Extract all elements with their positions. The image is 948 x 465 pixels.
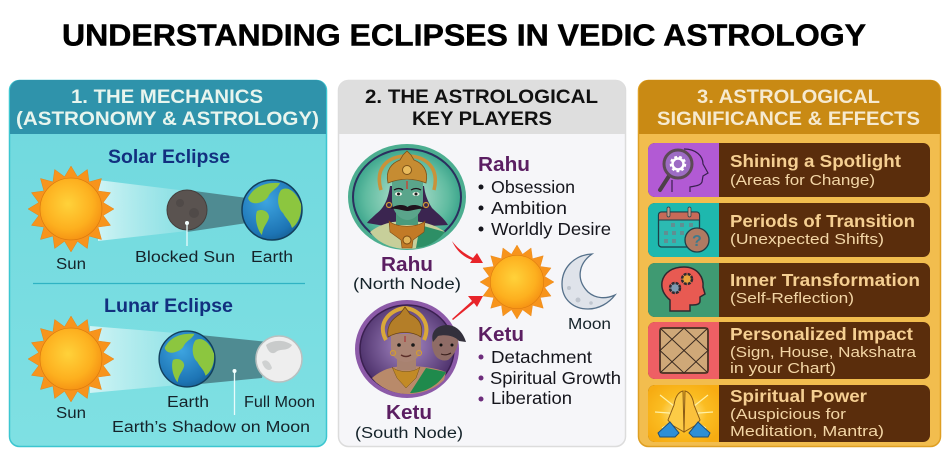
- panel header: key players: 2. THE ASTROLOGICAL: [365, 86, 598, 108]
- panel header: mechanics: [10, 80, 326, 134]
- row: shining a spotlight: Shining a Spotlight: [730, 151, 901, 171]
- label: north node: (North Node): [353, 276, 461, 293]
- icon: calendar with question mark: ?: [692, 233, 702, 250]
- panel header: significance: [639, 80, 940, 134]
- portrait: ketu: [355, 300, 466, 398]
- panel header: mechanics: (ASTRONOMY & ASTROLOGY): [16, 108, 319, 130]
- title: UNDERSTANDING ECLIPSES IN VEDIC ASTROLOGY: [62, 18, 866, 52]
- row: inner transformation: (Self-Reflection): [730, 290, 854, 307]
- text block: rahu traits: Worldly Desire: [491, 219, 611, 239]
- icon: crescent moon: [562, 254, 615, 309]
- icon: blocked sun: [167, 190, 207, 230]
- text block: ketu traits: Spiritual Growth: [490, 368, 621, 388]
- text block: rahu traits: [478, 154, 611, 239]
- row: spiritual power: Spiritual Power: [730, 386, 867, 406]
- text block: ketu traits: [478, 324, 621, 408]
- arrow: rahu to sun: [452, 241, 483, 263]
- row: spiritual power: (Auspicious for: [730, 406, 846, 423]
- label: earth: Earth: [251, 249, 293, 266]
- icon: praying hands: [655, 391, 713, 437]
- row: spiritual power: Meditation, Mantra): [730, 423, 884, 440]
- text block: rahu traits: Rahu: [478, 154, 530, 176]
- heading: lunar eclipse: Lunar Eclipse: [104, 295, 233, 317]
- arrow: ketu to sun: [452, 296, 483, 320]
- row: personalized impact: (Sign, House, Nakshatra: [730, 344, 917, 361]
- panel header: mechanics: 1. THE MECHANICS: [71, 86, 263, 108]
- diagram: solar eclipse: [28, 166, 302, 252]
- label: full moon: Full Moon: [244, 394, 315, 411]
- crown: [387, 151, 427, 183]
- icon: full moon: [256, 336, 302, 382]
- row: personalized impact: [648, 322, 930, 379]
- panel header: key players: [339, 80, 625, 134]
- necklace: [389, 221, 425, 248]
- panel: significance and effects: [638, 80, 940, 446]
- row: periods of transition: Periods of Transition: [730, 211, 915, 231]
- text block: ketu traits: Liberation: [491, 388, 572, 408]
- shoulders: [370, 221, 445, 249]
- icon: sun: [28, 316, 114, 402]
- row: periods of transition: (Unexpected Shifts): [730, 231, 884, 248]
- text block: rahu traits: Ambition: [491, 198, 567, 218]
- row: personalized impact: Personalized Impact: [730, 324, 913, 344]
- label: moon: Moon: [568, 316, 611, 333]
- row: personalized impact: in your Chart): [730, 360, 836, 377]
- text block: ketu traits: Ketu: [478, 324, 524, 346]
- label: rahu: Rahu: [381, 254, 433, 276]
- row: periods of transition: [648, 203, 930, 257]
- row: spiritual power: [648, 385, 930, 442]
- halo: [379, 156, 435, 190]
- label: earth's shadow on moon: Earth’s Shadow on Moon: [112, 419, 310, 436]
- panel: key players: [338, 80, 626, 446]
- label: blocked sun: Blocked Sun: [135, 249, 235, 266]
- label: south node: (South Node): [355, 425, 463, 442]
- icon: earth: [159, 331, 215, 387]
- row: shining a spotlight: [648, 143, 930, 197]
- pointer line: [185, 221, 189, 246]
- icon: sun: [480, 245, 554, 319]
- label: earth: Earth: [167, 394, 209, 411]
- icon: head with gears: [662, 267, 705, 311]
- icon: astrological chart: [660, 328, 708, 373]
- label: sun: Sun: [56, 256, 86, 273]
- label: sun: Sun: [56, 405, 86, 422]
- icon: sun: [28, 166, 114, 252]
- icon: head with magnifier: [660, 149, 708, 192]
- label: ketu: Ketu: [386, 402, 432, 424]
- panel: the mechanics: [10, 80, 326, 446]
- row: inner transformation: Inner Transformation: [730, 270, 920, 290]
- hair: [367, 186, 448, 226]
- heading: solar eclipse: Solar Eclipse: [108, 146, 230, 168]
- text block: rahu traits: Obsession: [491, 177, 575, 197]
- panel header: significance: SIGNIFICANCE & EFFECTS: [657, 108, 920, 130]
- row: shining a spotlight: (Areas for Change): [730, 172, 875, 189]
- icon: earth: [242, 180, 302, 240]
- text block: ketu traits: Detachment: [491, 347, 592, 367]
- face: [392, 180, 423, 220]
- panel header: key players: KEY PLAYERS: [412, 108, 552, 130]
- second head: [432, 330, 458, 361]
- row: inner transformation: [648, 263, 930, 317]
- portrait: rahu: [348, 144, 466, 250]
- diagram: lunar eclipse: [28, 316, 302, 415]
- icon: calendar with question mark: [658, 207, 709, 252]
- panel header: significance: 3. ASTROLOGICAL: [697, 86, 880, 108]
- pointer line: [232, 369, 236, 415]
